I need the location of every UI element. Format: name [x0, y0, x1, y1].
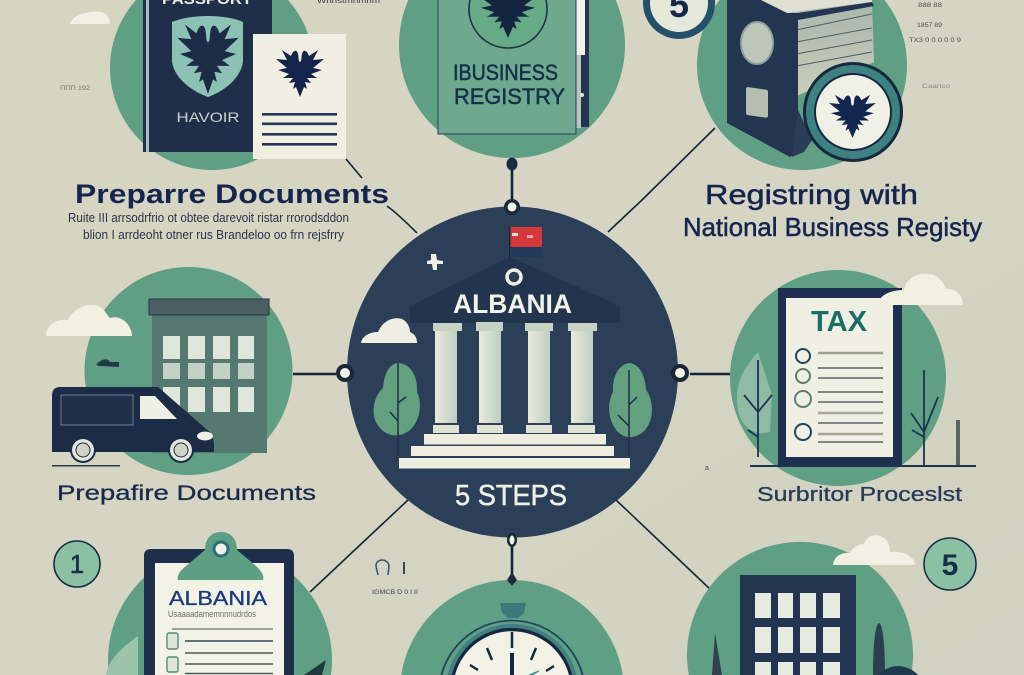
icon: passport — [143, 0, 272, 152]
tiny notes: 888 88 — [918, 2, 942, 9]
icon: passport: HAVOIR — [176, 109, 240, 125]
tiny note: IGMCB D 0 I II — [372, 590, 418, 596]
heading: top-left step: Preparre Documents — [75, 179, 389, 209]
badge: step 5 — [643, 0, 715, 39]
icon: right tree — [609, 363, 652, 456]
green disc — [687, 542, 913, 675]
heading: top-right step: Registring with — [705, 179, 918, 210]
connector bead — [506, 158, 518, 170]
icon: pen — [576, 0, 589, 128]
icon: small bird — [96, 359, 119, 367]
text block: top-left step description — [68, 211, 349, 242]
badge: step 5 — [924, 538, 976, 590]
icon: left tree — [737, 352, 772, 457]
heading: right step: Surbritor Proceslst — [757, 484, 963, 506]
panel: top-left passport step — [60, 0, 346, 170]
icon: cloud — [361, 318, 417, 343]
panel: right tax step — [730, 270, 976, 486]
tiny note — [372, 560, 418, 596]
icon: flag — [509, 227, 542, 258]
icon: left tree — [374, 363, 420, 456]
green disc — [110, 0, 314, 170]
icon: stopwatch — [440, 603, 584, 675]
icon: registry book — [438, 0, 576, 134]
dark disc — [347, 206, 678, 538]
icon: right tree — [911, 370, 938, 465]
icon: government building: ALBANIA — [453, 289, 572, 319]
icon: building — [149, 299, 269, 453]
icon: leaves — [106, 636, 326, 675]
panel: bottom-centre stopwatch step — [372, 560, 623, 675]
icon: van — [52, 387, 214, 466]
panel: bottom-left Albania clipboard step — [54, 532, 332, 675]
heading: top-right step: National Business Registy — [683, 212, 982, 242]
connector bead — [507, 572, 517, 586]
icon: tax checklist: TAX — [811, 306, 868, 338]
tiny notes: Caanco — [922, 83, 950, 90]
icon: tax checklist — [778, 288, 902, 467]
icon: clipboard: ALBANIA — [169, 588, 268, 610]
ground line — [750, 465, 976, 467]
green disc — [108, 548, 332, 675]
tiny notes: TX3 0 0 0 0 0 9 — [909, 37, 961, 44]
icon: government building — [399, 257, 630, 468]
tiny note: ΠΠΠ 192 — [60, 85, 90, 92]
panel: top-right registry step — [643, 0, 961, 170]
icon: eagle medallion — [803, 62, 903, 162]
cloud — [877, 274, 963, 305]
caption: 5 steps: 5 STEPS — [455, 480, 567, 512]
tiny notes: 1857 89 — [917, 22, 942, 29]
green disc — [401, 580, 623, 675]
badge: step 1: 1 — [70, 549, 84, 579]
icon: dark cone tree — [712, 633, 722, 675]
panel: left delivery van and building step — [46, 267, 292, 475]
icon: plane — [427, 254, 443, 270]
cloud — [833, 535, 915, 565]
panel: central Albania circle — [336, 199, 689, 547]
text block: top-left step description: Ruite III arrsodrfrio ot obtee darevoit ristar rrorodsddon — [68, 211, 349, 225]
green disc — [697, 0, 907, 170]
green disc — [84, 267, 292, 475]
connector lines — [293, 128, 730, 592]
icon: clipboard: Usaaaadamemnnnudrdos — [168, 609, 256, 619]
icon: binder — [727, 0, 874, 157]
heading: left step: Prepafire Documents — [57, 482, 316, 505]
panel: bottom-right building step — [687, 535, 976, 675]
icon: document with eagle — [253, 34, 346, 159]
icon: dark cypress — [873, 623, 885, 675]
heading: top-right step — [683, 179, 982, 242]
icon: clipboard — [144, 532, 294, 675]
tiny marks: a — [705, 465, 709, 472]
panel: top-centre business registry step — [399, 0, 625, 170]
text block: top-left step description: blion I arrdeoht otner rus Brandeloo oo frn rejsfrry — [83, 228, 345, 242]
icon: magnifier — [878, 666, 918, 675]
green disc — [399, 0, 625, 158]
cloud — [70, 12, 110, 24]
cloud — [46, 305, 132, 336]
tiny notes — [909, 2, 961, 90]
icon: post — [956, 420, 960, 466]
badge: step 5: 5 — [942, 549, 958, 582]
icon: building — [740, 575, 856, 675]
icon: registry book: IBUSINESS — [453, 60, 558, 85]
badge: step 1 — [54, 541, 100, 587]
connector knobs — [336, 199, 689, 547]
icon: registry book: REGISTRY — [454, 84, 565, 109]
green disc — [730, 270, 946, 486]
